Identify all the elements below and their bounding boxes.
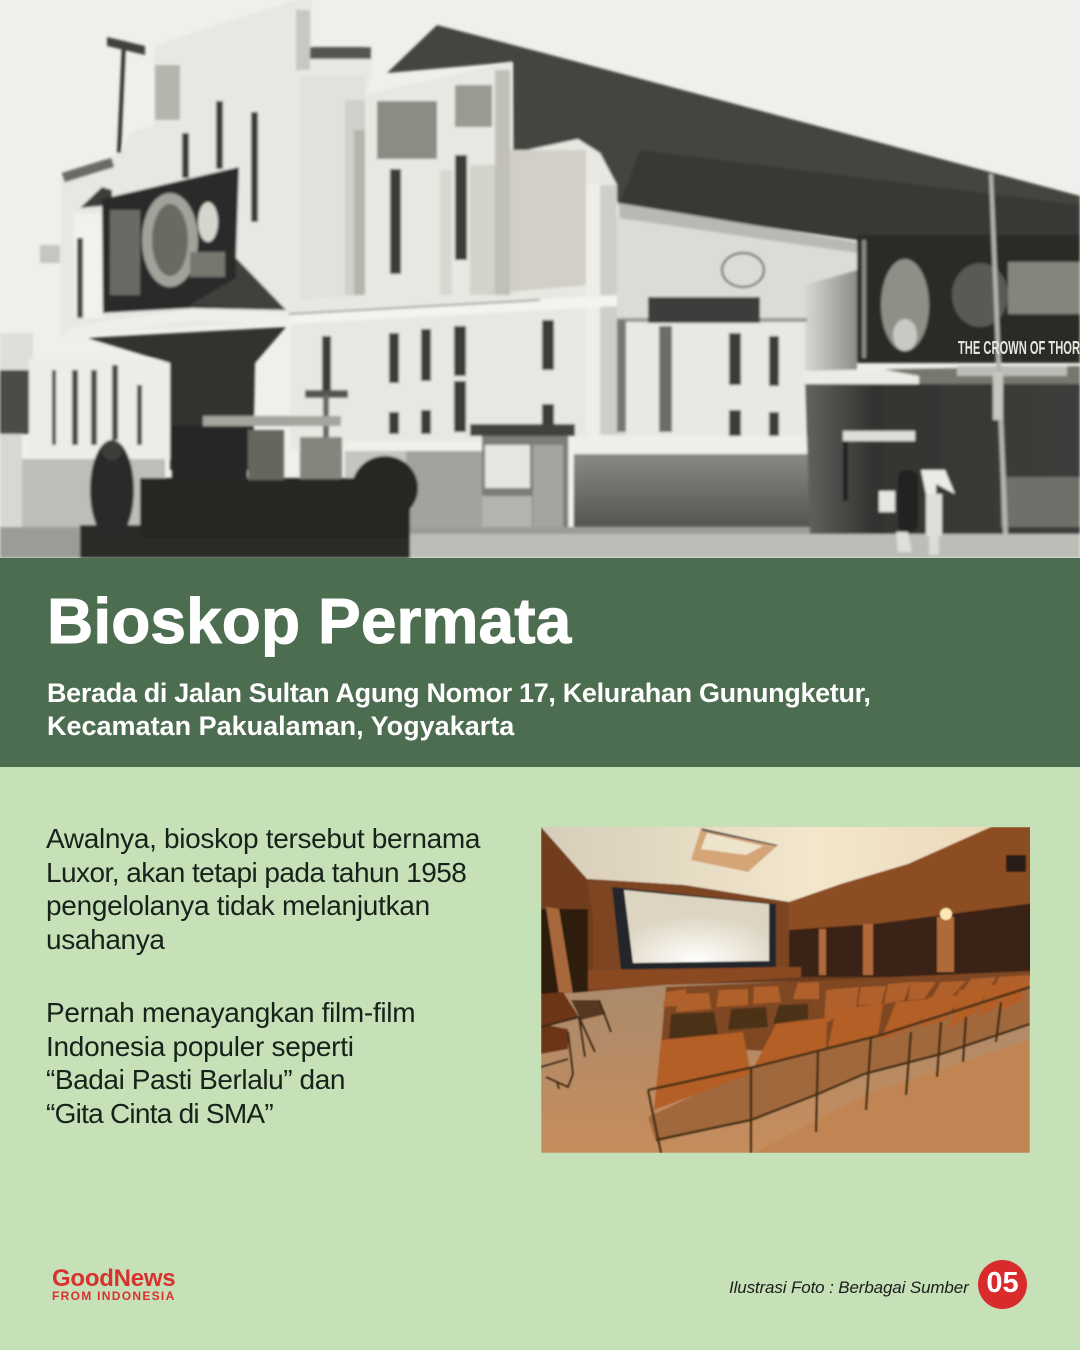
left columns wing <box>0 333 33 370</box>
text block: history paragraph: Awalnya, bioskop tersebut bernama <box>46 823 480 854</box>
floor <box>541 975 1030 1153</box>
text block: films paragraph <box>46 997 415 1129</box>
right billboard <box>857 235 1080 363</box>
wall lamp <box>940 908 952 920</box>
text block: films paragraph: “Gita Cinta di SMA” <box>46 1098 273 1129</box>
middle chair rows <box>663 975 1030 1024</box>
entrance and canopy <box>88 327 286 470</box>
caption: photo credit: Ilustrasi Foto : Berbagai Sumber <box>729 1278 969 1297</box>
logo: GoodNews from Indonesia <box>52 1265 176 1303</box>
pedestrians <box>898 470 918 532</box>
left billboard <box>102 167 286 313</box>
subheading: location <box>47 678 871 741</box>
front row chairs <box>654 982 1024 1110</box>
subheading: location: Kecamatan Pakualaman, Yogyakarta <box>47 711 514 741</box>
dark chair backs <box>669 1004 808 1039</box>
text block: history paragraph: Luxor, akan tetapi pada tahun 1958 <box>46 857 466 888</box>
ceiling <box>536 822 1001 902</box>
lower ledge and base <box>344 441 482 451</box>
right lower dark alcoves <box>789 903 1035 977</box>
carriage, people and horse <box>80 525 410 558</box>
carriage roof and post <box>305 390 348 398</box>
text block: films paragraph: Pernah menayangkan film-film <box>46 997 415 1028</box>
text block: films paragraph: “Badai Pasti Berlalu” dan <box>46 1064 345 1095</box>
windows <box>182 101 779 436</box>
kiosk <box>470 424 575 436</box>
logo wordmark: GoodNews <box>52 1265 175 1292</box>
awning and dark storefront <box>805 366 1080 384</box>
lamp post <box>989 174 1008 534</box>
right upper wood wall <box>789 827 1035 930</box>
ground <box>0 527 1080 558</box>
shelter <box>843 431 915 441</box>
roof <box>387 25 1080 240</box>
chair frames <box>648 987 1030 1153</box>
subheading: location: Berada di Jalan Sultan Agung Nomor 17, Kelurahan Gunungketur, <box>47 678 871 708</box>
text block: films paragraph: Indonesia populer seperti <box>46 1031 354 1062</box>
left small wing and upper facade <box>60 0 617 450</box>
photo: cinema interior with orange seats <box>541 827 1030 1153</box>
floor beneath front row <box>648 987 1030 1142</box>
screen wall <box>588 879 789 992</box>
pole with crossbar <box>117 41 126 153</box>
text block: history paragraph: pengelolanya tidak melanjutkan <box>46 890 430 921</box>
photo: Bioskop Permata building, historic black and white <box>0 0 1080 558</box>
horizontal ledges <box>289 295 617 324</box>
banner: title band <box>0 558 1080 767</box>
page number badge: 05 <box>986 1267 1019 1299</box>
left side chairs <box>541 992 579 1054</box>
projection screen <box>612 887 776 970</box>
heading: Bioskop Permata: Bioskop Permata <box>47 585 571 657</box>
page number badge <box>978 1260 1027 1309</box>
left upper pillar <box>74 214 102 318</box>
wainscot <box>588 967 801 989</box>
text block: history paragraph: usahanya <box>46 924 165 955</box>
stains on facade <box>377 101 437 159</box>
left wall <box>541 827 593 997</box>
skylight <box>691 828 778 872</box>
back rows <box>661 971 1030 1057</box>
side wall with eave <box>617 216 857 438</box>
logo tagline: FROM INDONESIA <box>52 1289 176 1303</box>
text block: history paragraph <box>46 823 480 955</box>
